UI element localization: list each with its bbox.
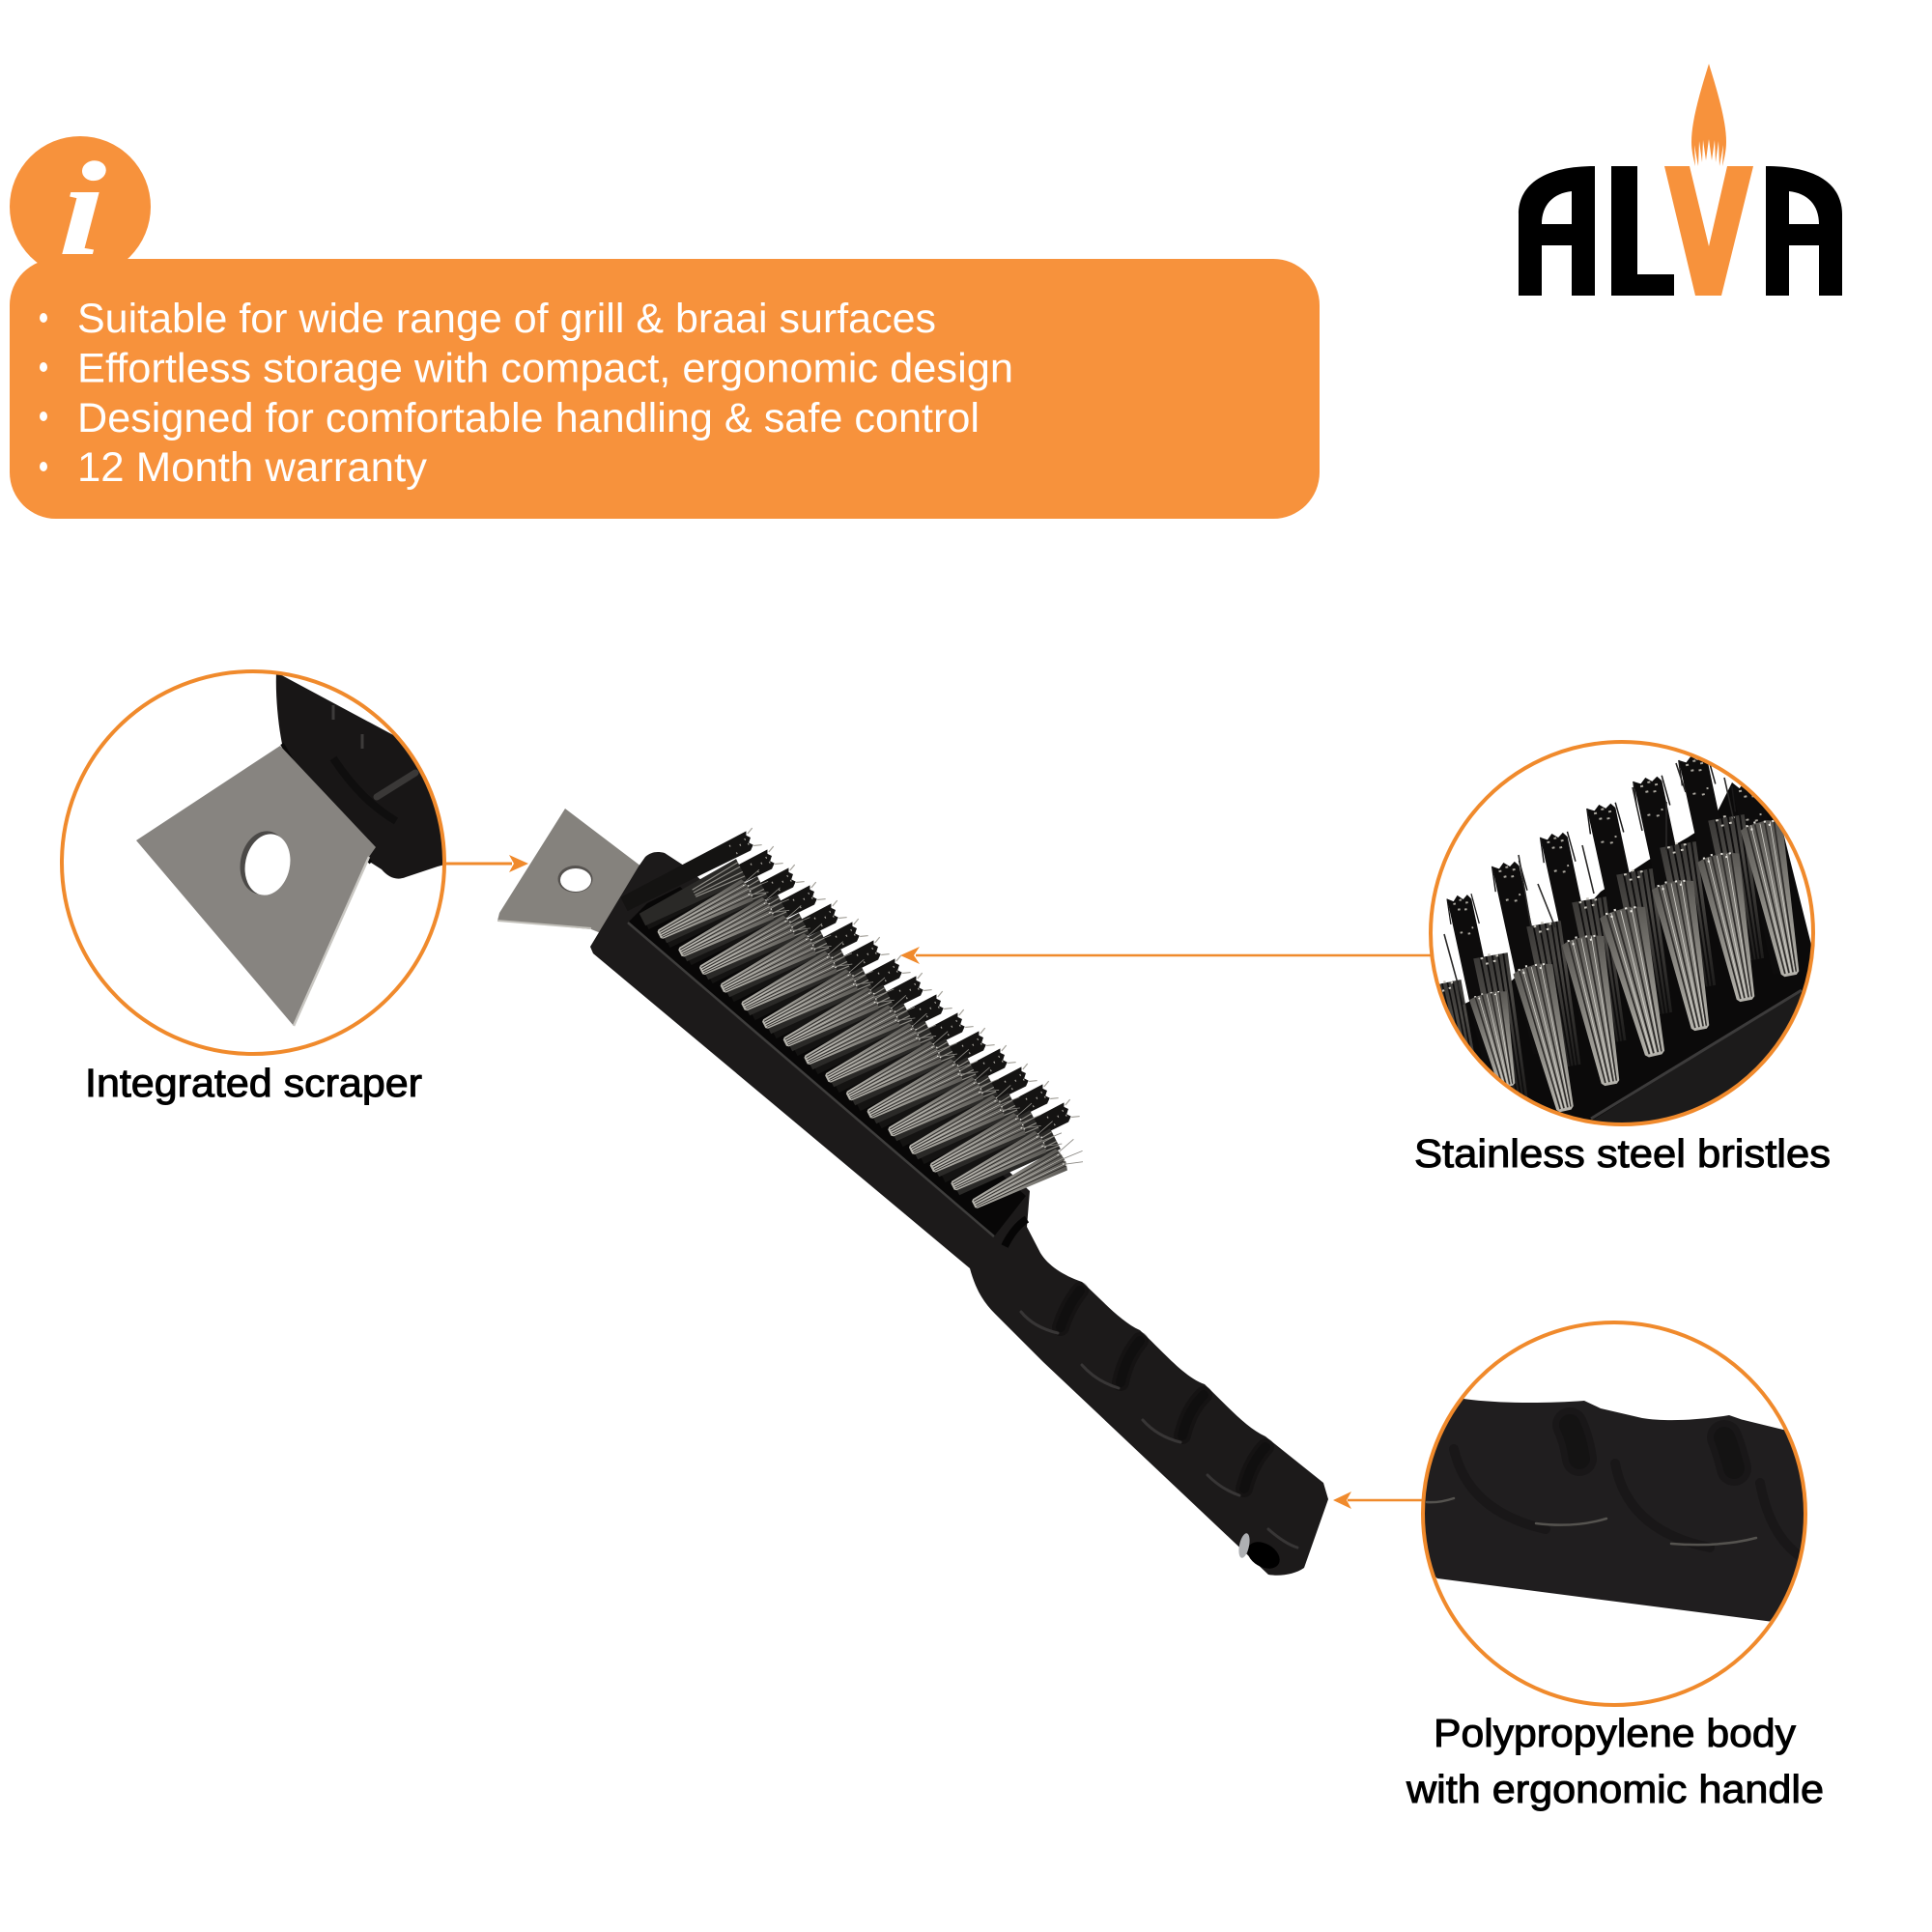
feature bullet list: Effortless storage with compact, ergonomic design — [77, 346, 1013, 392]
close-up highlights — [1427, 1498, 1756, 1545]
info icon: i — [56, 135, 108, 284]
panel: scraper close-up circle — [62, 671, 464, 1054]
logo: ALVA — [1519, 64, 1842, 296]
panel: bristles close-up circle — [1431, 742, 1829, 1143]
close-up scraper plate — [136, 746, 376, 1026]
feature bullet list: 12 Month warranty — [77, 444, 427, 491]
logo letter A — [1519, 166, 1595, 296]
feature bullet list — [40, 296, 1013, 491]
main product: wire brush — [497, 809, 1328, 1576]
hanging hole and pin — [1236, 1532, 1285, 1574]
close-up handle end — [276, 674, 442, 879]
close-up black tufts — [1446, 756, 1765, 1002]
brush body and handle — [590, 852, 1328, 1576]
close-up handle shape — [1420, 1399, 1816, 1621]
close-up grip shading — [1559, 1414, 1745, 1479]
logo letter A right — [1766, 166, 1842, 296]
feature bullet list: Suitable for wide range of grill & braai surfaces — [77, 296, 936, 342]
close-up stray wires — [1444, 763, 1734, 1005]
front row bristles — [653, 868, 1087, 1215]
label: polypropylene body with ergonomic handle: Polypropylene body — [1434, 1711, 1797, 1755]
label: polypropylene body with ergonomic handle: with ergonomic handle — [1406, 1767, 1824, 1811]
label: stainless steel bristles: Stainless steel bristles — [1414, 1131, 1831, 1176]
middle row bristles — [638, 859, 1061, 1200]
arrow: to handle — [1333, 1492, 1423, 1509]
logo letter L — [1611, 166, 1674, 296]
arrow: to bristles — [900, 947, 1431, 964]
info icon — [10, 135, 151, 284]
bristle recess — [628, 887, 1026, 1236]
close-up black base — [1464, 782, 1811, 1121]
feature bullet list: Designed for comfortable handling & safe control — [77, 395, 980, 441]
label: integrated scraper: Integrated scraper — [85, 1061, 422, 1105]
close-up silver tufts — [1468, 817, 1811, 1116]
panel: handle close-up circle — [1420, 1322, 1816, 1705]
panel: feature banner — [10, 259, 1320, 519]
close-up middle tufts — [1439, 814, 1764, 1096]
handle grip shading — [1005, 1219, 1297, 1548]
scraper blade — [497, 809, 641, 933]
back row bristles — [619, 828, 1080, 1184]
logo flame — [1691, 64, 1726, 167]
arrow: to scraper — [443, 855, 528, 872]
label: polypropylene body with ergonomic handle — [1406, 1711, 1824, 1811]
close-up plate — [1594, 990, 1803, 1122]
logo letter V — [1664, 166, 1753, 296]
